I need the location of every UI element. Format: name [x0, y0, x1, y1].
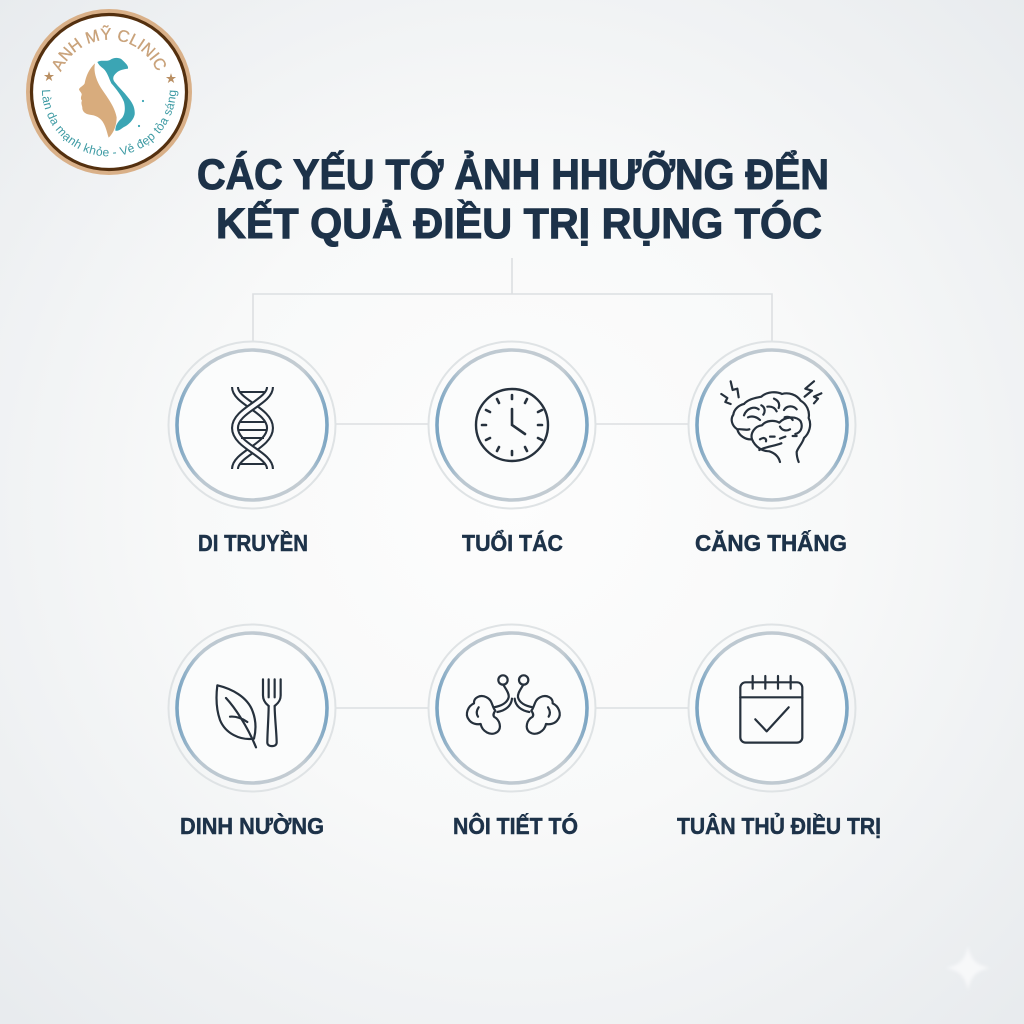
- label: NÔI TIẾT TÓ: [453, 812, 578, 839]
- icon: calendar with check: [740, 676, 802, 743]
- logo slogan: Làn da mạnh khỏe - Vẻ đẹp tỏa sáng: [42, 90, 178, 156]
- factor: tuân thủ điều trị: [677, 624, 881, 839]
- logo stars: ★: [166, 73, 176, 85]
- logo stars: ★: [44, 71, 54, 83]
- title: CÁC YẾU TỚ ẢNH HHƯỠNG ĐỂN: [197, 150, 829, 199]
- label: TUỔI TÁC: [462, 529, 563, 556]
- logo: Anh Mỹ Clinic: [26, 9, 192, 175]
- logo face silhouette: [79, 63, 117, 138]
- factor: dinh dưỡng: [168, 624, 336, 839]
- factor: tuổi tác: [428, 342, 596, 556]
- icon: clock: [476, 389, 548, 461]
- icon: brain with stress bolts: [721, 381, 821, 462]
- label: TUÂN THỦ ĐIỀU TRỊ: [677, 811, 881, 839]
- title: KẾT QUẢ ĐIỀU TRỊ RỤNG TÓC: [216, 199, 822, 248]
- title: [197, 150, 829, 248]
- icon: glands: [467, 675, 560, 734]
- label: DI TRUYỀN: [198, 529, 308, 556]
- icon: DNA helix: [235, 387, 270, 469]
- logo Vietnam map: [97, 58, 135, 131]
- sparkle watermark: [946, 946, 990, 990]
- logo islands: [138, 100, 144, 127]
- factor: di truyền: [168, 342, 336, 556]
- connector lines: [253, 258, 772, 708]
- factor: nội tiết tố: [428, 624, 596, 839]
- label: CĂNG THẤNG: [695, 529, 847, 556]
- factor: căng thẳng: [688, 342, 856, 556]
- label: DINH NƯỜNG: [180, 812, 324, 839]
- icon: leaf and fork: [217, 679, 281, 747]
- logo name: ANH MỸ CLINIC: [52, 25, 166, 72]
